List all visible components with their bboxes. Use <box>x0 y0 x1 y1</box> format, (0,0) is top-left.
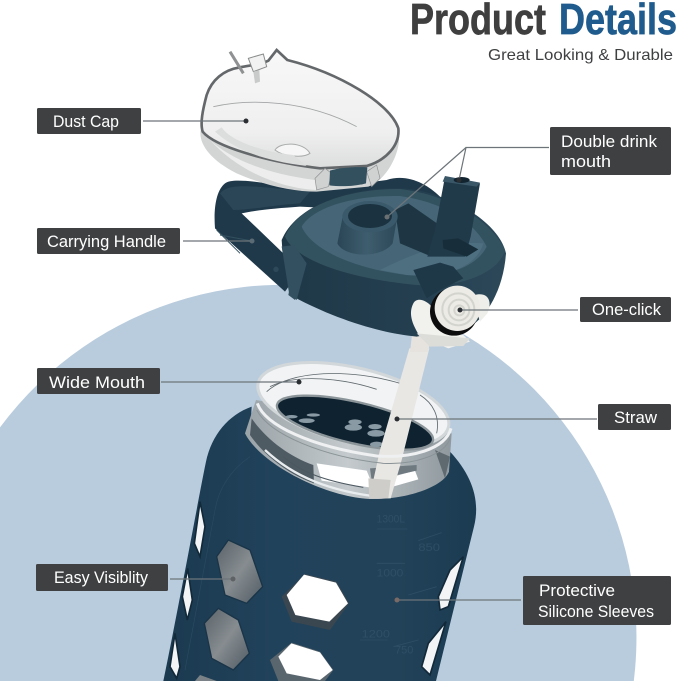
mouth thread lines <box>267 373 438 433</box>
neck reflections <box>250 418 450 497</box>
silicone sleeve <box>163 407 476 681</box>
glass mouth <box>250 347 457 463</box>
sleeve seam <box>185 457 250 670</box>
front glass rim <box>257 403 451 498</box>
dust cap <box>200 50 399 192</box>
label: Protective Silicone Sleeves: Protective <box>539 581 615 600</box>
lid assembly <box>200 50 506 348</box>
lid body <box>282 188 506 337</box>
label: Easy Visiblity: Easy Visiblity <box>54 568 148 587</box>
label: Straw <box>598 404 671 430</box>
hexagon windows <box>195 540 349 681</box>
label: Dust Cap <box>37 108 141 134</box>
straw upper <box>410 335 432 352</box>
carrying handle <box>215 178 440 300</box>
straw <box>369 348 429 498</box>
title <box>410 0 677 44</box>
double drink mouth: round neck <box>337 201 398 255</box>
label: Double drink mouth: mouth <box>561 152 611 171</box>
label: Easy Visiblity <box>36 564 168 591</box>
volume markings: 1200 <box>362 628 390 640</box>
label: Double drink mouth <box>550 127 671 175</box>
glass neck <box>245 400 452 499</box>
label: Protective Silicone Sleeves <box>523 576 671 625</box>
volume markings: 750 <box>395 644 413 656</box>
volume markings: 850 <box>418 542 440 554</box>
label: Carrying Handle <box>37 228 180 254</box>
label: Double drink mouth: Double drink <box>561 132 657 151</box>
label: Carrying Handle: Carrying Handle <box>47 232 166 251</box>
subtitle: Great Looking & Durable <box>488 47 673 64</box>
volume markings: 1300L <box>377 514 405 526</box>
label: Dust Cap: Dust Cap <box>53 112 119 131</box>
label: Wide Mouth: Wide Mouth <box>49 373 145 392</box>
double drink mouth: straw spout <box>427 176 480 257</box>
volume markings: 1000 <box>377 568 403 580</box>
label: Straw: Straw <box>614 408 658 427</box>
side slots <box>170 502 463 678</box>
background circle <box>0 285 636 681</box>
one-click button <box>411 263 490 348</box>
label: One-click <box>580 297 671 322</box>
label: Wide Mouth <box>37 368 160 394</box>
bottle <box>163 347 476 681</box>
label: Protective Silicone Sleeves: Silicone Sleeves <box>538 602 654 621</box>
slot behind neck <box>395 203 442 257</box>
label: One-click: One-click <box>592 300 661 319</box>
bottle interior <box>272 385 438 461</box>
callout lines <box>143 118 597 602</box>
volume markings <box>360 514 442 656</box>
